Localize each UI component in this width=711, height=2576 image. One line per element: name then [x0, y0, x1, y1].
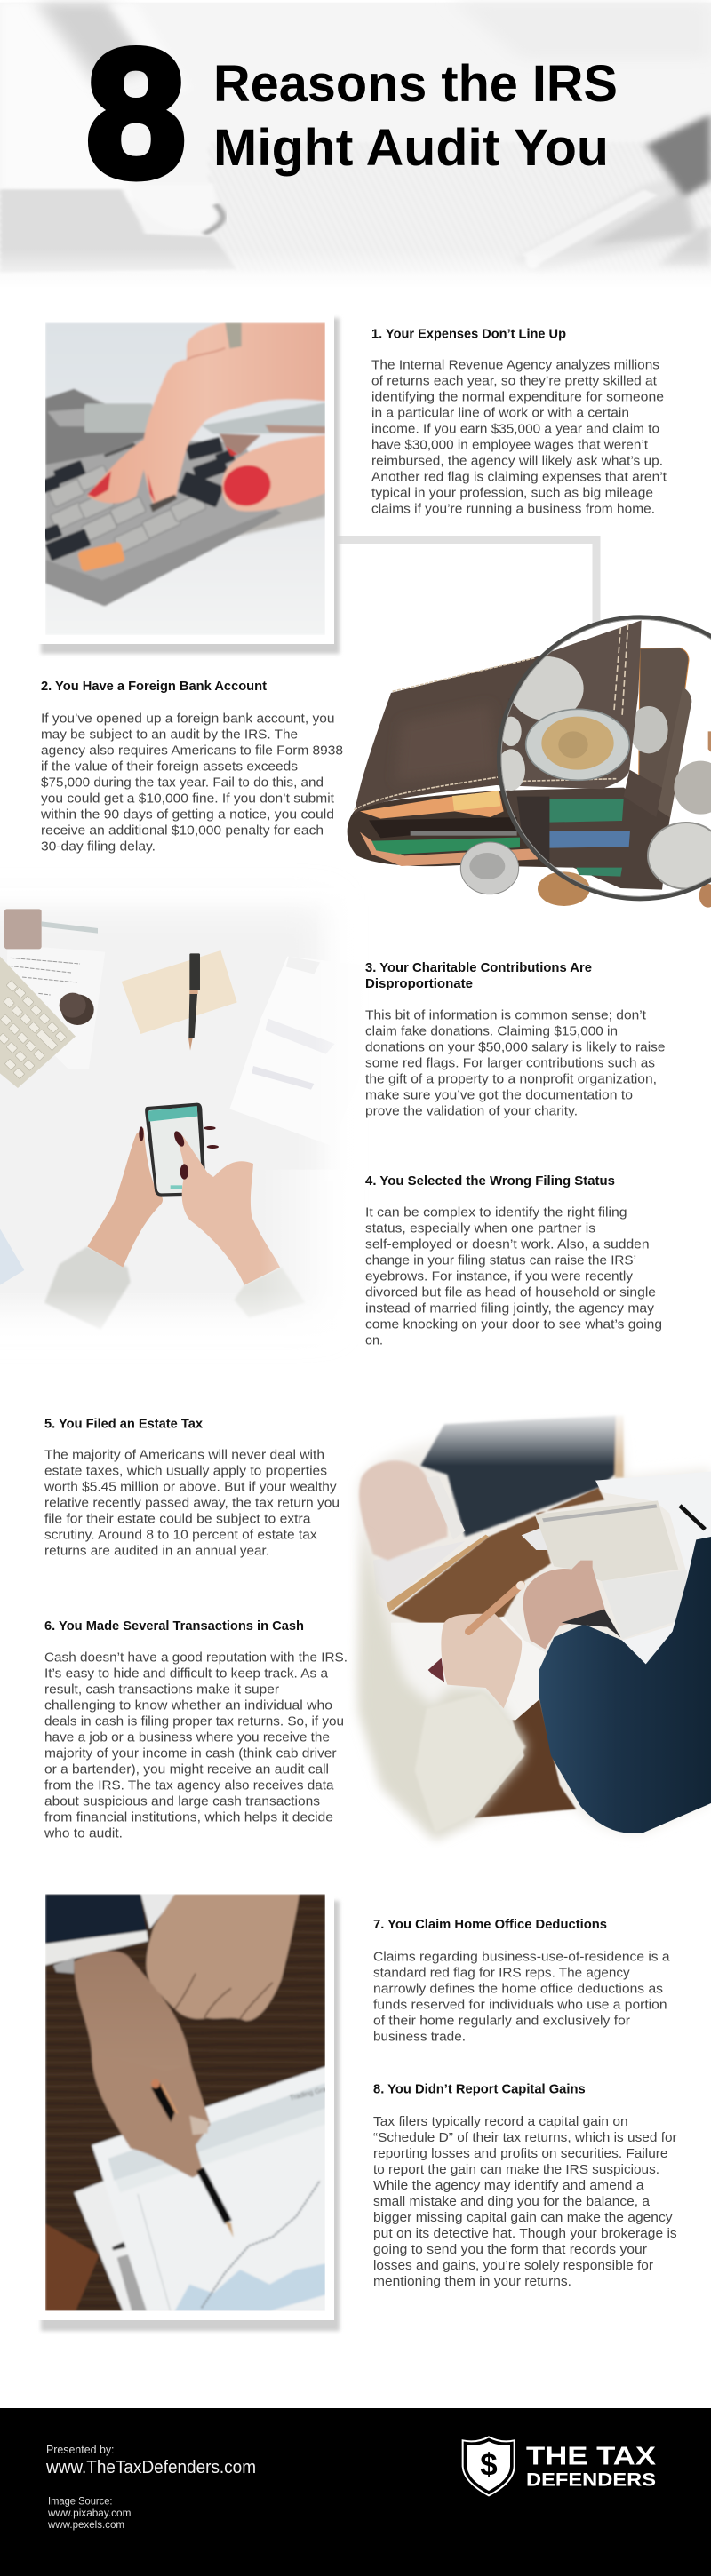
icon: blurred pen — [513, 114, 711, 273]
body 1: in a particular line of work or with a certain — [371, 405, 629, 421]
body 1: income. If you earn $35,000 a year and claim to — [371, 421, 659, 437]
body 7 — [373, 1950, 670, 2045]
fountain pen — [151, 2079, 234, 2238]
body 4: self-employed or doesn’t work. Also, a sudden — [365, 1237, 650, 1252]
body 6: from the IRS. The tax agency also receives data — [44, 1778, 334, 1793]
body 8: put on its detective hat. Though your brokerage is — [373, 2226, 677, 2241]
body 1 — [371, 357, 667, 517]
body 3: This bit of information is common sense; don’t — [365, 1007, 647, 1023]
icon: silver coin on table — [460, 842, 519, 894]
body 8: small mistake and ding you for the balance, a — [373, 2194, 651, 2209]
panel: wallet under magnifying glass photo — [348, 617, 711, 908]
body 5 — [44, 1448, 340, 1558]
round stamp — [60, 993, 94, 1025]
blue sheet — [0, 1228, 24, 1285]
body 8: mentioning them in your returns. — [373, 2274, 571, 2289]
right hand — [176, 1134, 280, 1285]
body 4 — [365, 1205, 662, 1348]
nails — [139, 1126, 219, 1180]
presented by: Presented by: — [46, 2443, 114, 2456]
body 4: divorced but file as head of household or single — [365, 1285, 656, 1300]
body 6: It’s easy to hide and difficult to keep track. As a — [44, 1666, 329, 1682]
logo: The Tax Defenders: THE TAX — [526, 2443, 657, 2471]
body 6: have a job or a business where you receive the — [44, 1730, 330, 1745]
body 7: narrowly defines the home office deductions as — [373, 1982, 663, 1997]
body 2: within the 90 days of getting a notice, you could — [40, 807, 334, 823]
body 1: reimbursed, the agency will likely ask what’s up. — [371, 453, 663, 469]
connector frame line — [334, 540, 596, 626]
body 8: “Schedule D” of their tax returns, which is used for — [373, 2130, 677, 2145]
heading 7: 7. You Claim Home Office Deductions — [373, 1917, 607, 1932]
body 8: going to send you the form that records your — [373, 2242, 647, 2257]
body 4: change in your filing status can raise the IRS’ — [365, 1253, 636, 1268]
body 8 — [373, 2114, 677, 2289]
body 4: status, especially when one partner is — [365, 1221, 595, 1236]
suit across the table — [420, 1415, 624, 1537]
body 3: the gift of a property to a nonprofit organization, — [365, 1071, 657, 1087]
body 5: scrutiny. Around 8 to 10 percent of estate tax — [44, 1528, 317, 1542]
black pen — [680, 1506, 705, 1530]
lower hand over documents — [92, 2054, 211, 2178]
body 2: agency also requires Americans to file Form 8938 — [41, 743, 343, 759]
phone — [145, 1103, 206, 1197]
body 5: worth $5.45 million or above. But if your wealthy — [44, 1480, 337, 1494]
body 4: come knocking on your door to see what’s going — [365, 1317, 662, 1332]
pen — [188, 953, 200, 1051]
body 2: may be subject to an audit by the IRS. The — [41, 727, 298, 743]
title line 2: Might Audit You — [213, 119, 609, 177]
body 5: relative recently passed away, the tax return you — [44, 1496, 340, 1510]
heading 3: 3. Your Charitable Contributions Are — [365, 960, 592, 975]
logo: The Tax Defenders: DEFENDERS — [526, 2469, 656, 2491]
body 5: returns are audited in an annual year. — [44, 1544, 269, 1558]
title — [86, 12, 618, 215]
panel: header banner photo — [0, 3, 711, 302]
heading 2: 2. You Have a Foreign Bank Account — [41, 679, 267, 694]
wood table — [391, 1488, 604, 1818]
body 3: donations on your $50,000 salary is likely to raise — [365, 1039, 665, 1055]
calculator — [0, 957, 76, 1088]
body 1: identifying the normal expenditure for someone — [371, 389, 664, 405]
photo base with soft edges — [358, 1415, 711, 1839]
body 2 — [40, 712, 343, 855]
body 8: reporting losses and profits on securities. Failure — [373, 2146, 668, 2161]
section 7 text — [373, 1917, 670, 2045]
white papers — [595, 1472, 711, 1670]
section 4 text — [365, 1173, 662, 1348]
body 4: eyebrows. For instance, if you were recently — [365, 1269, 634, 1284]
heading 6: 6. You Made Several Transactions in Cash — [44, 1618, 304, 1634]
heading 4: 4. You Selected the Wrong Filing Status — [365, 1173, 615, 1189]
icon: shield with dollar sign: $ — [480, 2448, 498, 2483]
image source: www.pixabay.com — [47, 2507, 131, 2519]
body 3: make sure you’ve got the documentation to — [365, 1087, 633, 1103]
navy sleeve — [539, 1537, 711, 1833]
body 1: have $30,000 in employee wages that weren’t — [371, 437, 649, 453]
beige sleeve — [358, 1534, 526, 1839]
body 6: challenging to know whether an individual who — [44, 1698, 332, 1713]
body 4: It can be complex to identify the right filing — [365, 1205, 627, 1220]
logo: The Tax Defenders — [463, 2437, 657, 2495]
body 7: business trade. — [373, 2030, 466, 2045]
body 8: to report the gain can make the IRS suspicious. — [373, 2162, 659, 2177]
body 6: Cash doesn’t have a good reputation with the IRS. — [44, 1650, 348, 1666]
body 6: from financial institutions, which helps it decide — [44, 1810, 333, 1825]
panel: meeting with documents photo — [347, 1386, 711, 1839]
icon: copper coin — [538, 871, 590, 906]
hand with rose gold pen — [428, 1581, 525, 1708]
body 6 — [44, 1650, 348, 1841]
heading 3 — [365, 960, 592, 991]
receipt paper — [229, 957, 364, 1146]
body 3: claim fake donations. Claiming $15,000 in — [365, 1023, 618, 1039]
image source — [47, 2495, 131, 2531]
heading 5: 5. You Filed an Estate Tax — [44, 1417, 204, 1432]
body 7: Claims regarding business-use-of-residence is a — [373, 1950, 670, 1965]
body 5: The majority of Americans will never deal with — [44, 1448, 324, 1462]
body 6: majority of your income in cash (think cab driver — [44, 1746, 337, 1761]
icon: bi-metal coin — [526, 709, 629, 780]
icon: shield with dollar sign — [463, 2437, 515, 2495]
body 6: deals in cash is filing proper tax returns. So, if you — [44, 1714, 344, 1729]
presented by — [45, 2443, 256, 2477]
area chart — [175, 2263, 325, 2311]
hand across the table — [359, 1460, 489, 1612]
body 1: Another red flag is claiming expenses that aren’t — [371, 469, 667, 485]
body 6: about suspicious and large cash transactions — [44, 1794, 320, 1809]
image source: www.pexels.com — [47, 2518, 124, 2531]
open notebook — [535, 1501, 688, 1622]
body 3: prove the validation of your charity. — [365, 1103, 578, 1119]
section 6 text — [44, 1618, 348, 1841]
body 2: you could get a $10,000 fine. If you don’t submit — [41, 791, 335, 807]
body 4: instead of married filing jointly, the agency may — [365, 1301, 655, 1316]
section 8 text — [373, 2081, 677, 2289]
body 1: of returns each year, so they’re pretty skilled at — [371, 373, 658, 389]
panel: calculator photo — [32, 307, 340, 654]
body 8: bigger missing capital gain can make the agency — [373, 2210, 673, 2225]
heading 1: 1. Your Expenses Don’t Line Up — [371, 327, 566, 341]
section 1 text — [371, 327, 667, 517]
wooden stamp block — [4, 909, 98, 949]
hand with watch — [523, 1561, 620, 1650]
paper under pen hand — [391, 1617, 545, 1721]
body 2: receive an additional $10,000 penalty for each — [41, 823, 324, 839]
body 6: result, cash transactions make it super — [44, 1682, 279, 1697]
body 6: who to audit. — [44, 1826, 123, 1841]
body 7: standard red flag for IRS reps. The agency — [373, 1966, 630, 1981]
section 2 text — [40, 679, 343, 855]
notebook cover — [45, 2223, 100, 2311]
big numeral 8: 8 — [86, 12, 186, 215]
footer — [0, 2408, 711, 2576]
body 8: Tax filers typically record a capital gain on — [373, 2114, 628, 2129]
body 5: file for their estate could be subject to extra — [44, 1512, 311, 1526]
body 3 — [365, 1007, 665, 1119]
title line 1: Reasons the IRS — [213, 55, 618, 113]
body 4: on. — [365, 1333, 383, 1348]
sleeves — [44, 1246, 305, 1330]
notebook — [122, 950, 237, 1034]
documents: Trading Gra — [289, 2085, 328, 2102]
body 8: While the agency may identify and amend a — [373, 2178, 644, 2193]
heading 3: Disproportionate — [365, 976, 473, 991]
body 6: or a bartender), you might receive an audit call — [44, 1762, 329, 1777]
body 7: funds reserved for individuals who use a portion — [373, 1998, 667, 2013]
body 1: typical in your profession, such as big mileage — [371, 485, 653, 501]
image source: Image Source: — [48, 2495, 112, 2508]
presented by: www.TheTaxDefenders.com — [45, 2458, 256, 2477]
body 3: some red flags. For larger contributions such as — [365, 1055, 655, 1071]
section 3 text — [365, 960, 665, 1119]
body 2: $75,000 during the tax year. Fail to do this, and — [41, 775, 324, 791]
panel: desk with phone photo — [0, 888, 367, 1344]
body 1: The Internal Revenue Agency analyzes millions — [371, 357, 659, 373]
body 2: if the value of their foreign assets exceeds — [41, 759, 298, 775]
body 7: of their home regularly and exclusively for — [373, 2014, 630, 2029]
documents — [74, 2067, 328, 2311]
icon: magnifying glass ring — [499, 617, 711, 899]
body 5: estate taxes, which usually apply to properties — [44, 1464, 327, 1478]
paper with notes — [6, 944, 105, 1069]
section 5 text — [44, 1417, 340, 1558]
panel: hands pointing at chart photo — [32, 1887, 340, 2331]
left hand — [87, 1128, 163, 1268]
body 8: losses and gains, you’re solely responsible for — [373, 2258, 653, 2273]
heading 8: 8. You Didn’t Report Capital Gains — [373, 2081, 586, 2096]
body 1: claims if you’re running a business from home. — [371, 501, 655, 517]
body 2: 30-day filing delay. — [41, 839, 156, 855]
body 2: If you’ve opened up a foreign bank account, you — [41, 712, 334, 727]
